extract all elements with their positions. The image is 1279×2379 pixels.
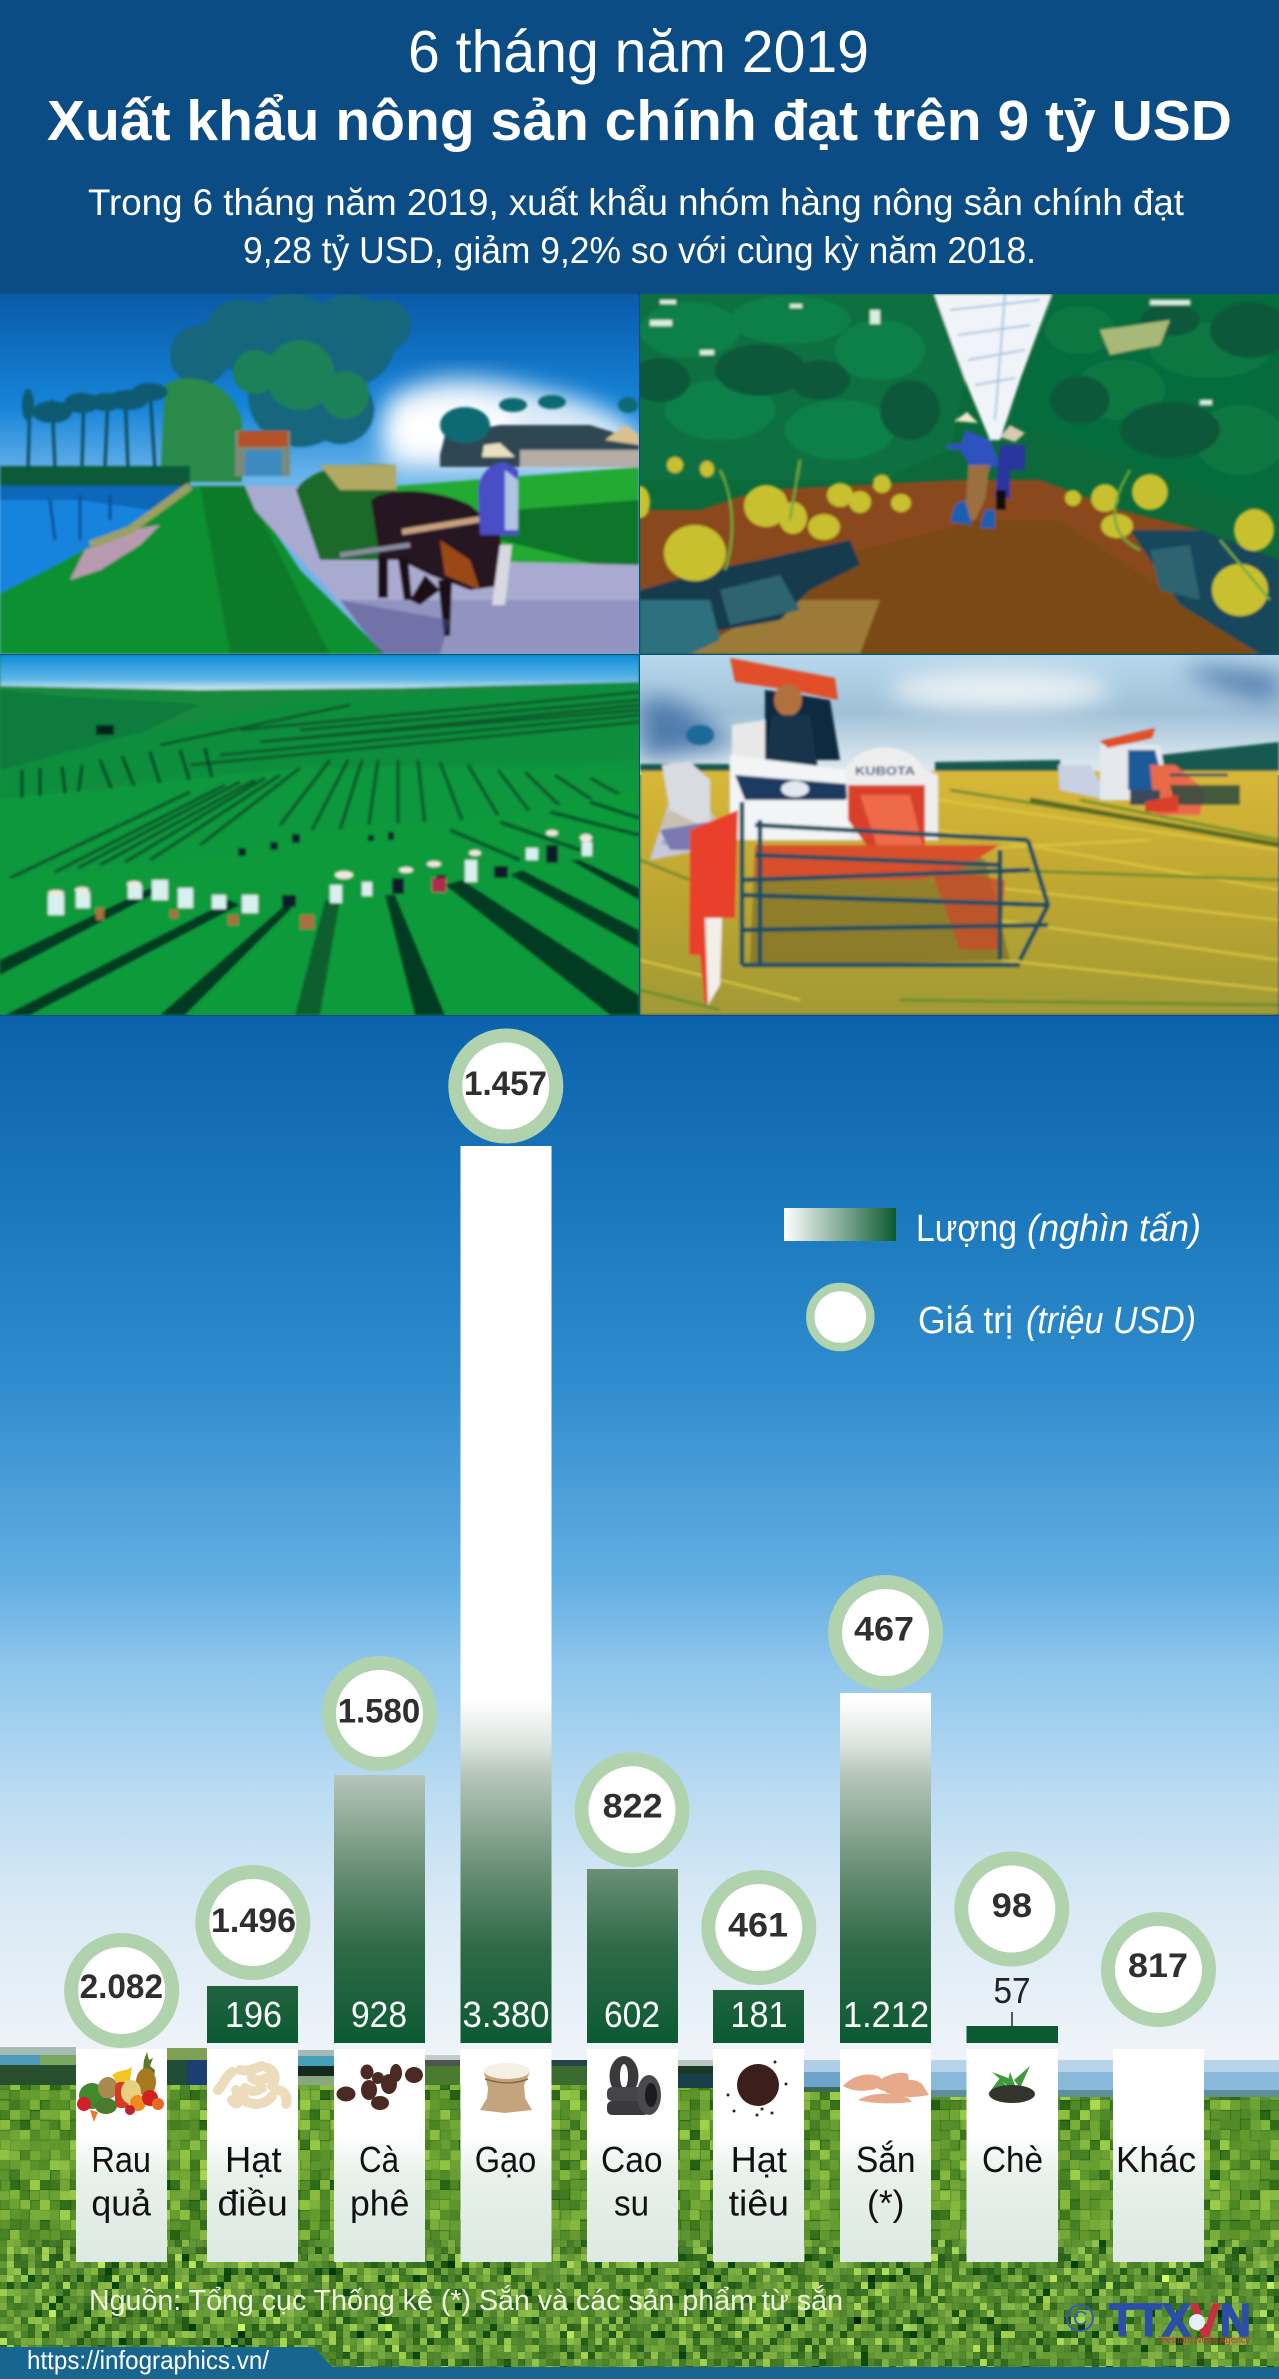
intro text: 9,28 tỷ USD, giảm 9,2% so với cùng kỳ năm 2018. [243,230,1036,271]
legend label: volume: Lượng [916,1208,1017,1250]
title line 2: Xuất khẩu nông sản chính đạt trên 9 tỷ USD [47,89,1232,153]
label: Cao su: su [614,2183,649,2224]
photo: village road with ox cart [0,293,639,654]
label: Hạt điều: Hạt [225,2139,282,2180]
circle: Hạt điều [202,1872,303,1973]
bar: Hạt tiêu [713,1990,804,2043]
legend label: value: Giá trị [918,1300,1013,1342]
bar: Gạo: 3.380 [462,1994,550,2035]
bar: Cà phê: 928 [351,1994,407,2035]
circle: Khác [1108,1919,1209,2020]
footer band with URL: https://infographics.vn/ [27,2345,270,2375]
label: Cà phê: phê [350,2183,409,2224]
label: Cao su: Cao [601,2139,662,2180]
legend label: volume: (nghìn tấn) [1027,1208,1201,1250]
bar: Chè [966,1970,1058,2043]
logo: TTXVN: TTXVN [1109,2294,1251,2346]
circle: Hạt điều: 1.496 [211,1902,296,1940]
circle: Cao su: 822 [603,1787,663,1825]
icon: tires [607,2056,661,2115]
panel: Sắn [840,2049,931,2262]
photo: tea plantation [0,655,640,1015]
label: Sắn: (*) [867,2183,904,2224]
sky background [0,1016,1279,2106]
intro text [88,182,1185,271]
circle: Cà phê: 1.580 [338,1692,420,1730]
legend swatch: volume [784,1208,896,1241]
photo: melon greenhouse [630,294,1279,654]
bar: Cao su [587,1869,678,2043]
panel: Chè [966,2049,1058,2262]
label: Hạt tiêu: Hạt [731,2139,787,2180]
circle: Gạo: 1.457 [464,1065,547,1103]
label: Gạo: Gạo [475,2139,536,2180]
bar: Gạo [460,1146,552,2043]
circle: Sắn [835,1582,936,1683]
circle: Hạt tiêu: 461 [728,1907,788,1945]
icon: coffee beans [336,2064,423,2110]
logo: TTXVN: Vietnam News Agency [1159,2335,1250,2346]
circle: Cà phê [329,1663,430,1764]
logo: TTXVN: C [1073,2308,1087,2330]
label: Hạt điều: điều [218,2183,288,2224]
label: Cà phê: Cà [359,2139,400,2180]
panel: Hạt điều [207,2049,298,2262]
bar: Cao su: 602 [604,1994,660,2035]
category panels [76,2049,1204,2262]
circle: Cao su [582,1759,682,1860]
footer band with URL [0,2345,1279,2379]
bar: Chè: 57 [994,1970,1030,2011]
circle: Sắn: 467 [854,1611,914,1649]
label: Hạt tiêu: tiêu [729,2183,789,2224]
icon: fruit pile [77,2052,164,2122]
label: Khác: Khác [1116,2139,1196,2180]
legend swatch: value [810,1287,870,1347]
circle: Khác: 817 [1128,1947,1188,1985]
circle: Rau quả: 2.082 [80,1968,163,2006]
icon: rice sack [480,2063,532,2113]
circle: Hạt tiêu [708,1877,809,1978]
icon: pepper grains [726,2060,788,2116]
panel: Khác [1113,2049,1204,2262]
circle: Rau quả [71,1940,172,2041]
label: Chè: Chè [982,2139,1043,2180]
icon: tea leaves [988,2066,1035,2103]
icon: cashew nuts [218,2066,287,2104]
photo: rice harvesters [640,655,1279,1015]
bar: Sắn: 1.212 [843,1994,929,2035]
label: Rau quả: Rau [91,2139,151,2180]
label: Rau quả: quả [91,2183,152,2224]
title line 1: 6 tháng năm 2019 [408,19,869,85]
panel: Hạt tiêu [713,2049,804,2262]
label: Sắn: Sắn [856,2139,916,2180]
value circles [71,1036,1209,2041]
panel: Gạo [460,2049,552,2262]
bar: Sắn [840,1693,931,2043]
bar: Hạt điều [207,1986,298,2043]
bar: Hạt điều: 196 [225,1994,282,2035]
header band [0,0,1279,294]
circle: Chè: 98 [992,1887,1032,1925]
pixelated grass field [0,2085,1279,2367]
bar: Hạt tiêu: 181 [730,1994,788,2035]
icon: cassava roots [843,2073,929,2103]
bar: Cà phê [334,1775,425,2043]
panel: Cà phê [334,2049,425,2262]
bar chart: export volume [207,1146,1058,2043]
circle: Gạo [455,1036,556,1136]
panel: Rau quả [76,2049,167,2262]
circle: Chè [961,1858,1062,1960]
photo: rice harvesters: KUBOTA [855,764,915,778]
legend [784,1208,1201,1347]
source note: Nguồn: Tổng cục Thống kê (*) Sắn và các sản phẩm từ sắn [89,2284,843,2317]
horizon water and tree line [0,2047,1279,2097]
panel: Cao su [587,2049,678,2262]
intro text: Trong 6 tháng năm 2019, xuất khẩu nhóm hàng nông sản chính đạt [88,182,1185,223]
legend label: value: (triệu USD) [1026,1300,1196,1342]
